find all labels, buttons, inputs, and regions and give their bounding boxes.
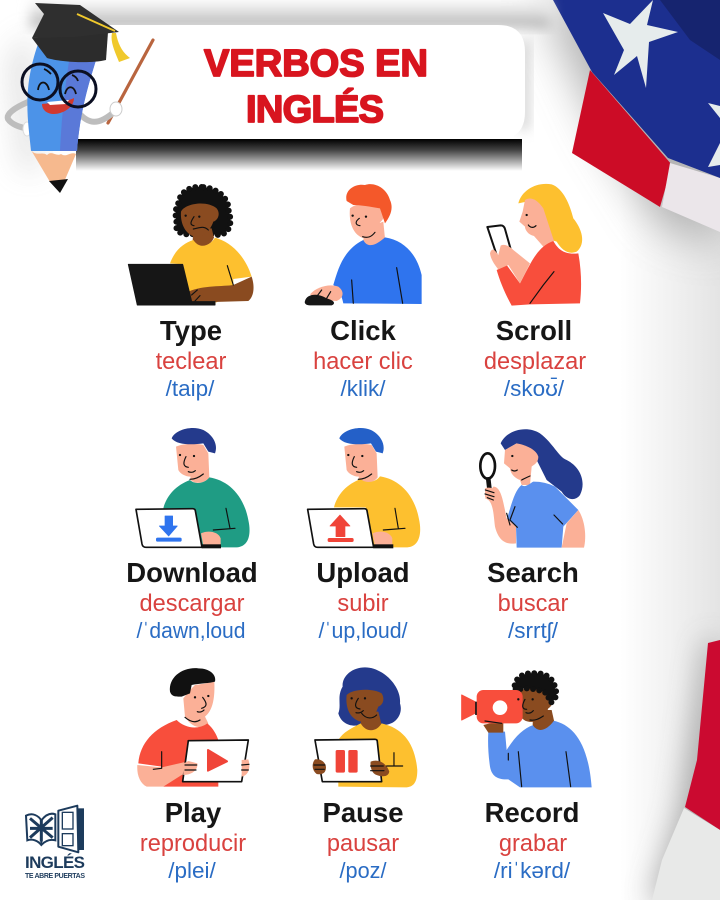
word: Search [487, 557, 579, 588]
pronunciation: /ˈup,loud/ [318, 618, 408, 643]
illustration: woman with magnifier [480, 429, 585, 548]
illustration: man uploading [308, 428, 420, 548]
title text: INGLÉS [246, 87, 384, 131]
body [27, 44, 96, 151]
word: Upload [316, 557, 410, 588]
title banner [30, 3, 550, 171]
item: Upload [308, 428, 420, 643]
illustration: man with video camera [462, 673, 592, 787]
word: Type [160, 315, 222, 346]
glasses [22, 64, 58, 100]
pronunciation: /skoʊ̄/ [504, 376, 565, 401]
translation: desplazar [484, 349, 586, 375]
logo icon: book and door [26, 806, 84, 852]
arms [8, 102, 114, 129]
logo [25, 806, 85, 880]
logo tagline: TE ABRE PUERTAS [25, 873, 85, 880]
logo wordmark: INGLÉS [25, 853, 85, 872]
item: Type [128, 187, 254, 401]
item: Search [480, 429, 585, 643]
illustration: woman with phone [487, 184, 582, 306]
pointer stick [108, 40, 153, 123]
word: Scroll [496, 315, 572, 346]
item: Pause [313, 667, 417, 883]
translation: teclear [156, 349, 227, 375]
item: Play [137, 668, 249, 883]
translation: grabar [499, 831, 567, 857]
illustration: man with tablet play [137, 668, 249, 787]
word: Play [165, 797, 222, 828]
word: Record [485, 797, 579, 828]
translation: pausar [327, 831, 399, 857]
pronunciation: /srrtʃ/ [508, 618, 559, 643]
title text [204, 43, 428, 131]
word: Click [330, 315, 397, 346]
flag stars [603, 0, 720, 167]
translation: descargar [140, 591, 245, 617]
translation: reproducir [140, 831, 246, 857]
pronunciation: /ˈdawn,loud [136, 618, 246, 643]
mouth [42, 98, 74, 114]
pronunciation: /taip/ [166, 376, 215, 401]
item: Record [462, 673, 592, 883]
flag: bottom right corner [652, 640, 720, 900]
word: Download [126, 557, 258, 588]
item: Scroll [484, 184, 586, 401]
pronunciation: /plei/ [168, 858, 217, 883]
item: Click [305, 184, 422, 401]
pronunciation: /riˈkərd/ [494, 858, 571, 883]
illustration: man clicking mouse [305, 184, 422, 305]
item: Download [126, 428, 258, 643]
illustration: woman with tablet pause [313, 667, 417, 787]
translation: hacer clic [313, 349, 413, 375]
illustration: woman typing [128, 187, 254, 305]
translation: subir [337, 591, 389, 617]
flag: top right corner [553, 0, 720, 232]
illustration: man downloading [136, 428, 250, 548]
word: Pause [322, 797, 404, 828]
translation: buscar [498, 591, 569, 617]
pronunciation: /klik/ [340, 376, 386, 401]
pronunciation: /poz/ [340, 858, 387, 883]
graduation cap [32, 32, 108, 62]
mascot: pencil with cap [8, 3, 153, 193]
title text: VERBOS EN [204, 43, 428, 85]
